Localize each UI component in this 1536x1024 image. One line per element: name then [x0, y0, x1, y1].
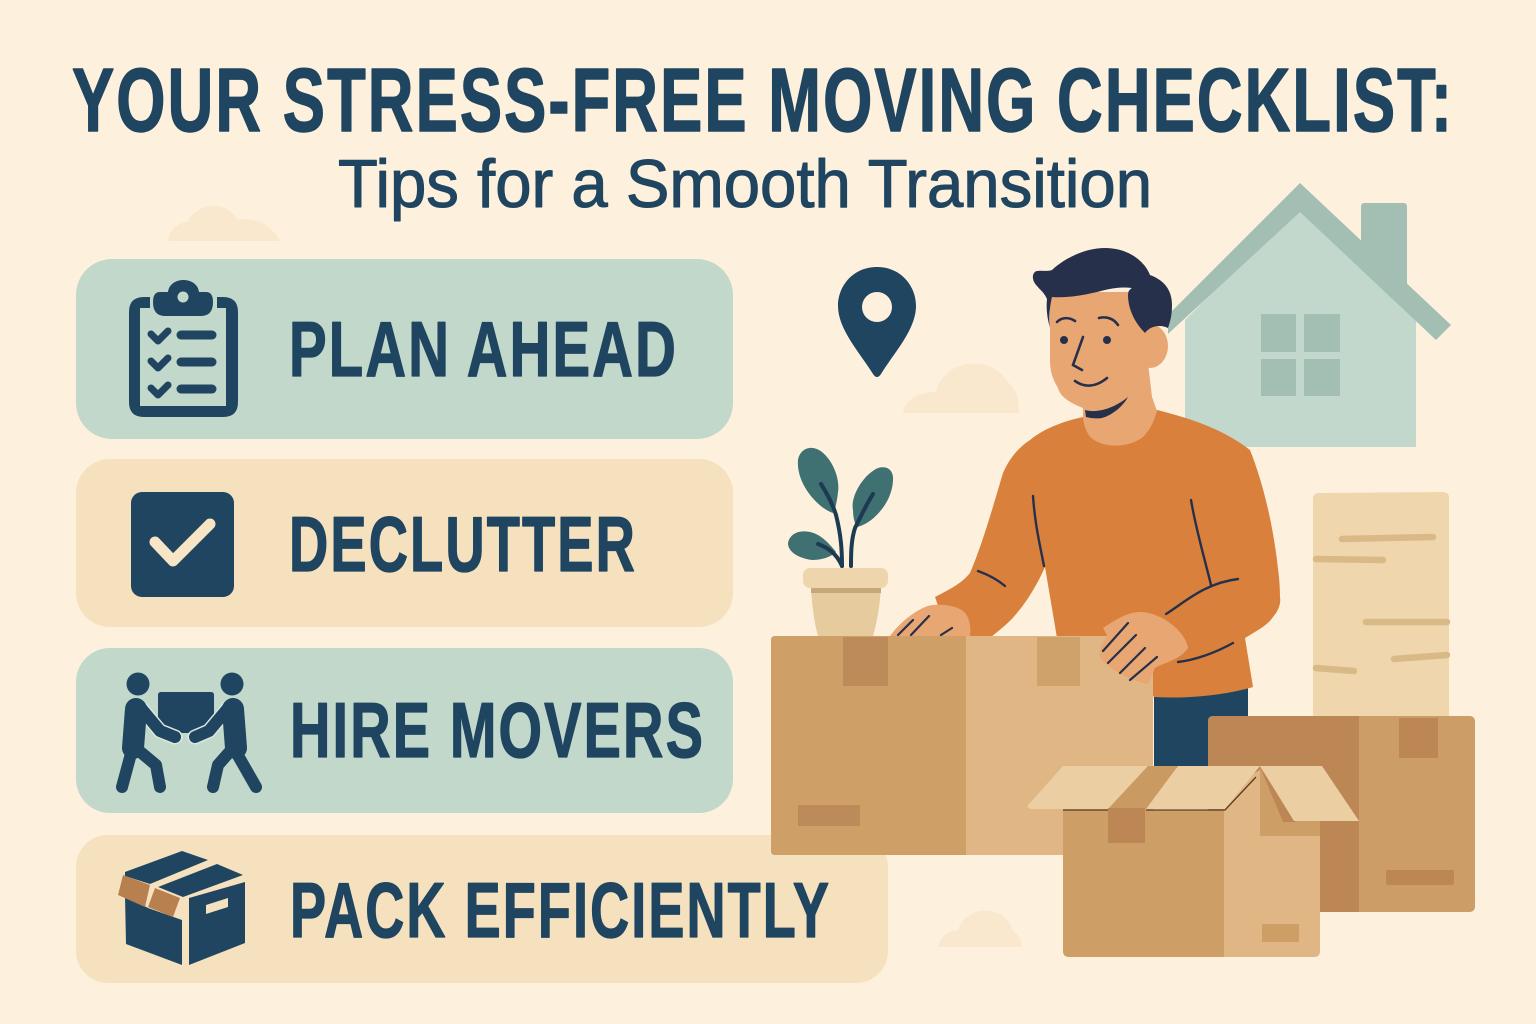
- face details: [1057, 317, 1118, 386]
- house: [1168, 183, 1451, 447]
- icon: checkbox: [131, 492, 234, 597]
- open box: [1027, 766, 1359, 957]
- sweater creases: [978, 496, 1238, 662]
- panel: pack efficiently: [76, 835, 888, 983]
- panel: hire movers: [76, 648, 733, 813]
- neck: [1083, 363, 1157, 446]
- right hand: [1100, 612, 1188, 684]
- chin shadow: [1085, 397, 1128, 418]
- label: plan ahead: PLAN AHEAD: [289, 305, 678, 393]
- hair: [1033, 248, 1172, 333]
- cloud: top left: [168, 206, 280, 241]
- icon: location pin: [838, 267, 916, 377]
- cloud: bottom: [938, 910, 1022, 947]
- person: [935, 248, 1280, 768]
- panel: plan ahead: [76, 259, 733, 439]
- label: hire movers: HIRE MOVERS: [290, 686, 705, 774]
- subtitle: Tips for a Smooth Transition: [338, 146, 1152, 222]
- plant pot: [803, 568, 888, 636]
- icon: package: [118, 851, 245, 965]
- label: declutter: DECLUTTER: [289, 500, 637, 588]
- face: [1050, 292, 1150, 409]
- icon: clipboard: [129, 280, 238, 417]
- back box: [1208, 716, 1475, 912]
- pants: [1154, 688, 1248, 768]
- left hand: [890, 605, 970, 636]
- ear: [1132, 324, 1168, 368]
- large box: [771, 636, 1153, 855]
- plant: [788, 448, 893, 636]
- label: pack efficiently: PACK EFFICIENTLY: [290, 866, 831, 954]
- panel: declutter: [76, 459, 733, 627]
- sweater: [935, 410, 1280, 698]
- cloud: middle: [903, 363, 1019, 413]
- paper stack: [1313, 492, 1449, 718]
- icon: two movers carrying box: [122, 672, 256, 787]
